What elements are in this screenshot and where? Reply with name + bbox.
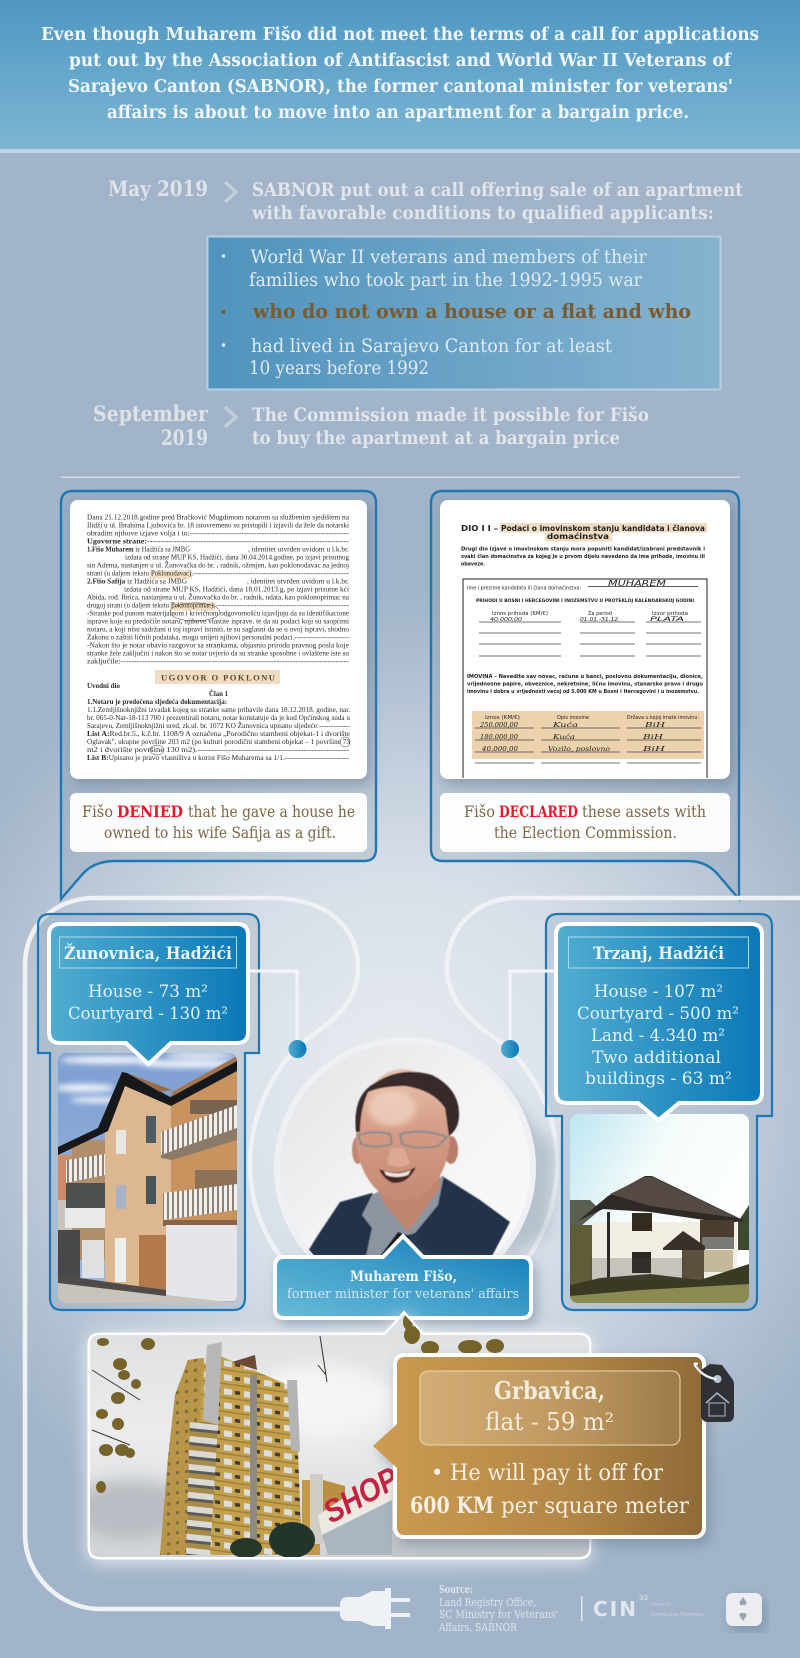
document: asset declaration form: Iznos (KM/€) (485, 715, 520, 721)
caption: denied: DENIED (117, 802, 183, 821)
document: asset declaration form: Država u kojoj imate imovinu: (627, 714, 699, 721)
caption: declared: Fišo (464, 803, 495, 821)
document: asset declaration form: Vozilo, poslovno (548, 746, 610, 753)
document: asset declaration form: Za period (588, 611, 612, 617)
logo: CIN: 33 (639, 1595, 648, 1602)
logo: CIN: Centre for (650, 1602, 672, 1608)
document: asset declaration form: PLATA (650, 616, 684, 623)
mouth (379, 1167, 416, 1183)
caption: declared: DECLARED (499, 802, 578, 821)
source text: Affairs, SABNOR (438, 1621, 518, 1634)
head (356, 1069, 450, 1201)
date: September 2019 (93, 401, 209, 450)
event text: SABNOR put out a call offering sale of an apartment (252, 180, 743, 201)
property sizes: House - 107 m² (594, 982, 723, 1002)
event text: with favorable conditions to qualified applicants: (251, 203, 714, 224)
document: gift contract: Poklonoprimac): (171, 600, 215, 610)
caption: denied: that he gave a house he (188, 803, 355, 821)
panel: asset declaration (431, 491, 739, 899)
document: gift contract: strani (u daljem tekstu (87, 568, 149, 578)
logo: CIN: CIN (593, 1597, 636, 1621)
title (41, 25, 759, 123)
logo: CIN (581, 1595, 703, 1621)
document: gift contract: izdata od strane MUP KS, Hadžići, dana 18.01.2013.g, po izjavi prisutne kći (124, 584, 349, 594)
event text: to buy the apartment at a bargain price (252, 428, 620, 449)
document: gift contract: 1.Notaru je predočena sljedeća dokumentacija: (87, 697, 227, 706)
caption: declared: the Election Commission. (494, 824, 677, 842)
date: May 2019: May 2019 (108, 176, 208, 201)
document: asset declaration form: BiH (641, 734, 664, 741)
document: gift contract: Uvodni dio (87, 681, 120, 690)
document: gift contract: sin Adema, nastanjen u ul. Žunovačka do br. , radnik, oženjen, kao poklonodavac na jednoj (87, 560, 349, 570)
document: gift contract: Abida, rođ. Ibrica, nastanjena u ul. Žunovačka do br. , radnik, udata, kao poklonoprimac na (87, 592, 350, 602)
callout: Grbavica flat (373, 1355, 704, 1537)
document: gift contract: -Stranke pod punom materijalnom i krivičnom odgovornošću izjavljuju da su identifikacione (87, 608, 350, 618)
document: asset declaration form: Podaci o imovinskom stanju kandidata i članova (501, 524, 705, 533)
condition 1: World War II veterans and members of their (250, 247, 647, 268)
second block (302, 1480, 320, 1555)
tower (160, 1355, 302, 1555)
title: Even though Muharem Fišo did not meet the terms of a call for applications (41, 25, 759, 45)
document: asset declaration form: 40.000,00 (490, 617, 523, 623)
roof (578, 1176, 745, 1223)
document: gift contract: Ugovorne strane:--------------------------------------------------------------------------- (87, 536, 349, 546)
timeline: September 2019 (93, 401, 649, 450)
document: gift contract: Poklonodavac). (151, 568, 193, 578)
source text: Land Registry Office, (439, 1596, 536, 1609)
document: asset declaration form: BiH (641, 746, 666, 753)
property sizes: Two additional (592, 1048, 721, 1068)
document: asset declaration form: Izvor prihoda (652, 611, 688, 617)
neck (378, 1176, 441, 1232)
document: gift contract: 1.1.Zemljišnoknjižni izvadak kojeg su stranke same pribavile dana 18.12.2018. godine, nar. (87, 705, 350, 714)
document: gift contract: 2.Fišo Safija iz Hadžića sa JMBG (87, 576, 187, 586)
document: asset declaration form: DIO I I – (461, 524, 498, 533)
caption: denied: Fišo (82, 803, 113, 821)
caption: denied (70, 793, 367, 852)
icon: wall socket (726, 1593, 762, 1626)
photo: Grbavica apartment block (70, 1310, 591, 1560)
leaves (96, 1314, 504, 1493)
document: gift contract: isprave koje su predočile notaru, njihove vlastite isprave, te da su podaci koji su saopćeni (87, 616, 349, 626)
document: asset declaration form: obaveze. (461, 562, 485, 568)
document: asset declaration form: 40.000,00 (481, 746, 518, 753)
windows (146, 1116, 156, 1143)
timeline: May 2019 (108, 176, 743, 224)
document: asset declaration form: Iznos prihoda (KM/€) (492, 611, 548, 617)
role: former minister for veterans' affairs (287, 1287, 519, 1302)
document: asset declaration form: IMOVINA – Navedite sav novac, račune u banci, poslovnu dokumentaciju, dionice, (467, 673, 703, 680)
document: asset declaration form: PRIHODI U BOSNI I HERCEGOVINI I INOZEMSTVU U PROTEKLOJ KALENDARSKOJ GODINI (476, 598, 694, 604)
document: gift contract: List B:Upisano je pravo vlasništva u korist Fišo Muharema sa 1/1.-------------------------- (87, 753, 349, 762)
panel: Žunovnica house (38, 914, 259, 1310)
logo: CIN: Investigative Reporting (650, 1612, 703, 1618)
callout: name label (275, 1236, 531, 1318)
location name: Žunovnica, Hadžići (64, 943, 232, 963)
document: gift contract: Zakonu o zaštiti ličnih podataka, mogu unijeti njihovi personalni podaci.----------------------- (87, 632, 349, 642)
document: gift contract: drugoj strani (u daljem tekstu (87, 600, 169, 610)
source text (438, 1583, 558, 1634)
document: asset declaration form: 180.000,00 (480, 734, 518, 741)
document: gift contract (70, 500, 367, 779)
condition 2 highlighted: who do not own a house or a flat and who (252, 299, 691, 323)
windows (632, 1213, 652, 1231)
document: asset declaration form (440, 500, 730, 779)
panel: gift contract (61, 491, 376, 899)
document: asset declaration form: Opis imovine (557, 715, 589, 721)
document: gift contract: notaru, a koji nisu sadržani u toj ispravi istiniti, te su saglasni da se u ovoj ispravi, shodno (87, 624, 349, 634)
document: asset declaration form: Kuća (551, 722, 579, 729)
document: gift contract: UGOVOR O POKLONU (161, 672, 275, 682)
title: Sarajevo Canton (SABNOR), the former cantonal minister for veterans' (68, 77, 733, 97)
document: asset declaration form: 01.01.-31.12. (580, 617, 620, 623)
caption: declared (440, 793, 730, 852)
condition 3 (222, 336, 613, 379)
document: gift contract: Oglavak", ukupne površine 203 m2 (po kulturi porodični stambeni objekat – 1 površine 73 (87, 737, 350, 746)
left wing (72, 1140, 108, 1260)
event text: The Commission made it possible for Fišo (252, 405, 649, 426)
property sizes (577, 982, 739, 1089)
mall facade (318, 1466, 392, 1535)
photo: house in Žunovnica (55, 1052, 240, 1303)
document: gift contract: 1.Fišo Muharem iz Hadžića sa JMBG (87, 544, 190, 554)
roof (58, 1061, 237, 1155)
document: gift contract: zaključile:------------------------------------------------------------------------------------- (87, 656, 349, 666)
condition 1: families who took part in the 1992-1995 war (249, 270, 642, 291)
date: September 2019: September (93, 401, 209, 426)
connector: right callout to portrait (501, 971, 556, 1058)
right wing (171, 1068, 237, 1230)
document: gift contract: br. 065-0-Nar-18-113 700 i prezentirali notaru, notar konstatuje da je kod Općinskog suda u (87, 713, 350, 722)
location name: Trzanj, Hadžići (593, 944, 724, 963)
property sizes: buildings - 63 m² (585, 1069, 732, 1089)
cable line (25, 898, 800, 1609)
connector: left callout to portrait (250, 971, 306, 1058)
document: gift contract: Sarajevu, Zemljišnoknjižni ured, zk.ul. br. 1072 KO Žunovnica upisano sljedeće:------------- (87, 720, 350, 730)
document: asset declaration form: Ime i prezime kandidata ili člana domaćinstva: (467, 584, 581, 592)
document: asset declaration form: domaćinstva (547, 532, 609, 541)
document: gift contract: ---------------------------------------------- (216, 600, 350, 610)
panel: conditions list (208, 236, 720, 390)
flat size: flat - 59 m² (485, 1408, 614, 1436)
document: gift contract: ------------------------------------------------------- (193, 568, 350, 578)
event text (252, 405, 649, 449)
document: gift contract: Dana 21.12.2018.godine pred Bračković Mugdimom notarom sa službenim sjedištem na (87, 512, 350, 522)
property sizes: Land - 4.340 m² (591, 1026, 725, 1046)
condition 3: had lived in Sarajevo Canton for at least (251, 336, 613, 357)
document: gift contract: , identitet utvrđen uvidom u l.k.br. (247, 576, 349, 586)
price line 2: per square meter (501, 1494, 689, 1519)
source text: SC Ministry for Veterans' (439, 1608, 558, 1621)
icon: cable plug (340, 1588, 410, 1629)
shirt (362, 1175, 444, 1256)
name: Muharem Fišo, (350, 1269, 457, 1285)
event text (251, 180, 743, 224)
callout: Trzanj details (556, 924, 762, 1120)
document: gift contract: , identitet utvrđen uvidom u l.k.br. (248, 544, 349, 554)
garden (570, 1264, 749, 1303)
property sizes: House - 73 m² (88, 982, 208, 1002)
trees (230, 1538, 262, 1558)
photo: house in Trzanj (570, 1114, 749, 1303)
document: gift contract: izdata od strane MUP KS, Hadžići, dana 30.04.2014.godine, po izjavi prisutnog (125, 552, 349, 562)
jacket (305, 1176, 510, 1256)
walls (592, 1222, 737, 1285)
date: September 2019: 2019 (161, 425, 208, 450)
panel: Trzanj house (546, 914, 772, 1310)
caption: declared: these assets with (582, 803, 706, 821)
shop sign: SHOP (317, 1460, 405, 1530)
document: asset declaration form: imovinu i dobra u vrijednosti većoj od 5.000 KM u Bosni i Hercegovini i u inozemstvu. (467, 688, 699, 695)
price line 2: 600 KM (410, 1493, 494, 1519)
main wall (105, 1085, 172, 1290)
document: asset declaration form: MUHAREM (608, 579, 666, 588)
glasses (358, 1132, 447, 1148)
document: asset declaration form: Drugi dio izjave o imovinskom stanju mora popuniti kandidat/izabrani predstavnik i (461, 546, 705, 552)
source text: Source: (439, 1583, 473, 1596)
balconies (161, 1105, 237, 1155)
document: gift contract: List A:Red.br.5., k.č.br. 1108/9 A označena „Porodično stambeni objekat-1 i dvorište (87, 729, 351, 738)
document: gift contract: Ilidži u ul. Ibrahima Ljubovića br. 18 istovremeno su pristupili i izjavili da žele da notarski (87, 520, 349, 530)
arrow: chevron (225, 407, 236, 427)
header banner (0, 0, 800, 153)
caption: denied: owned to his wife Safija as a gift. (104, 824, 336, 842)
ears (351, 1136, 361, 1164)
location: Grbavica, (494, 1376, 605, 1405)
document: gift contract: obradim njihove izjave volja i to:-------------------------------------------------------------- (87, 528, 349, 538)
portrait: Muharem Fišo (274, 1037, 560, 1255)
icon: house price tag (695, 1364, 734, 1422)
pavement (58, 1282, 237, 1303)
price line 1: • He will pay it off for (431, 1461, 663, 1486)
document: gift contract: m2 i dvorište površine 130 m2).----------------------------------------------------- (87, 745, 350, 754)
garages (166, 1225, 237, 1301)
nose (388, 1148, 410, 1167)
condition 1 (222, 247, 647, 291)
document: gift contract: -Nakon što je notar obavio razgovor sa strankama, objasnio prirodu pravnog posla koje (87, 640, 350, 650)
document: asset declaration form: svaki član domaćinstva za kojeg je u prvom dijelu navedeno da ima prihode, imovinu ili (461, 553, 705, 560)
condition 3: 10 years before 1992 (249, 358, 429, 379)
arrow: chevron (225, 182, 236, 202)
document: asset declaration form: Kuća (552, 734, 576, 741)
title: put out by the Association of Antifascist and World War II Veterans of (69, 51, 732, 71)
document: gift contract: stranke žele zaključiti i nakon što se notar uvjerio da su stranke sposobne i ovlaštene iste su (87, 648, 349, 658)
hair (355, 1072, 459, 1136)
title: affairs is about to move into an apartment for a bargain price. (107, 103, 689, 123)
document: asset declaration form: vrijednosne papire, obveznice, nekretnine, ličnu imovinu, stanarsko pravo i drugu (467, 680, 703, 688)
document: gift contract: Član 1 (209, 688, 228, 698)
property sizes: Courtyard - 130 m² (68, 1004, 228, 1024)
document: asset declaration form: BiH (643, 722, 666, 729)
callout: Žunovnica details (49, 924, 248, 1064)
price line 2 (410, 1493, 689, 1519)
property sizes (68, 982, 228, 1024)
document: asset declaration form: 250.000,00 (479, 722, 518, 729)
property sizes: Courtyard - 500 m² (577, 1004, 739, 1024)
